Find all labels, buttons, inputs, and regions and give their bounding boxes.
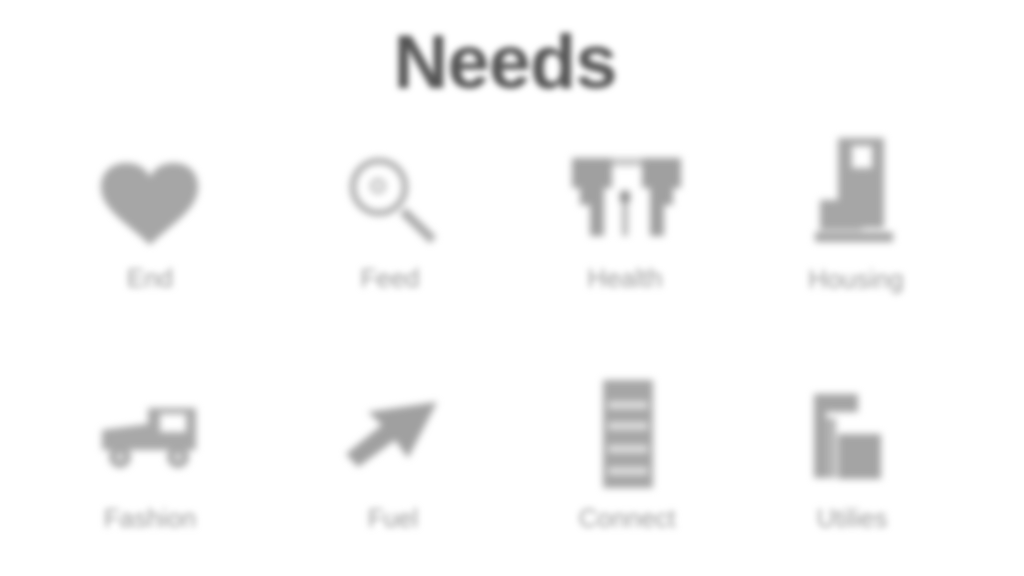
icon: buildings <box>814 394 881 479</box>
label: Feed: Feed <box>360 263 420 293</box>
label: Housing: Housing <box>808 264 904 294</box>
icon: heart <box>101 163 198 245</box>
label: End: End <box>127 263 173 293</box>
label: Fashion: Fashion <box>104 503 196 533</box>
label: Connect: Connect <box>579 503 675 533</box>
icon: health gate <box>572 158 681 236</box>
label: Fuel: Fuel <box>368 503 418 533</box>
icon: server stack <box>603 380 653 488</box>
label: Utilities: Utilies <box>817 503 887 533</box>
icon: truck <box>102 408 196 468</box>
icon: arrow <box>346 402 437 467</box>
icon: tower building <box>815 138 893 242</box>
title: Needs <box>393 20 617 105</box>
icon: magnifier <box>353 161 433 240</box>
label: Health: Health <box>587 263 663 293</box>
